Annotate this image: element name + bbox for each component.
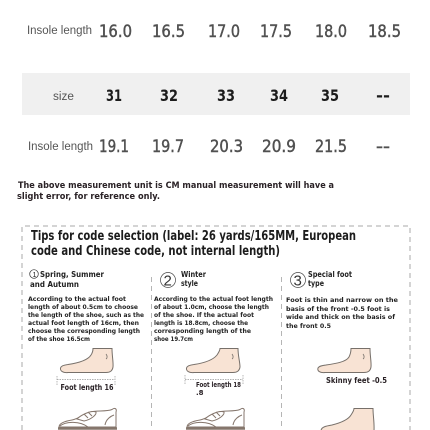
size row: 32 [160, 86, 178, 105]
foot length 18.8 measure: .8 [196, 389, 204, 397]
column dividers [152, 277, 282, 430]
tip 1: spring, summer and autumn: actual foot length of 16cm, then [28, 320, 139, 327]
icon: foot 2 [186, 348, 240, 373]
insole length row one: 17.5 [260, 22, 292, 41]
size row: 35 [321, 86, 339, 105]
tip 1: spring, summer and autumn: choose the corresponding length [28, 328, 140, 335]
measurement note: The above measurement unit is CM manual measurement will have a [18, 181, 334, 191]
icon: shoe 2 [186, 408, 245, 428]
tip 2: winter style: corresponding length of the [154, 328, 251, 335]
icon: skinny foot [318, 348, 371, 373]
tip 1: spring, summer and autumn: of the shoe 16.5cm [28, 336, 90, 343]
insole length row two: -- [376, 137, 390, 156]
tip 3: special foot type: Foot is thin and narrow on the [286, 296, 399, 304]
tip 2: winter style [154, 270, 273, 343]
tip 3: special foot type: wide and thick on the basis of [286, 313, 395, 321]
icon: foot 1 [60, 348, 113, 373]
tip 2: winter style: According to the actual foot length [154, 296, 273, 303]
tip 1: spring, summer and autumn: the length of the shoe, such as the [28, 312, 144, 319]
insole length row one [27, 22, 401, 41]
tip 2: winter style: 2 [164, 272, 172, 290]
size row [22, 73, 410, 115]
icon: foot 4 [321, 408, 374, 430]
tip 2: winter style: length is 18.8cm, choose the [154, 320, 248, 327]
size row: 33 [217, 86, 235, 105]
insole length row one: 18.5 [368, 22, 401, 41]
foot length 16 measure: Foot length 16 [60, 383, 114, 392]
tip 3: special foot type: type [308, 279, 324, 288]
tip 1: spring, summer and autumn: length of about 0.5cm to choose [28, 304, 138, 311]
insole length row one: 16.5 [152, 22, 185, 41]
insole length row one: Insole length [27, 25, 92, 37]
insole length row two: 20.3 [210, 137, 243, 156]
insole length row two [28, 137, 390, 156]
insole length row one: 18.0 [315, 22, 347, 41]
tip 2: winter style: style [181, 279, 198, 288]
tip 2: winter style: shoe 19.7cm [154, 336, 193, 343]
skinny feet label: Skinny feet -0.5 [326, 376, 387, 385]
insole length row two: 20.9 [262, 137, 296, 156]
insole length row one: 16.0 [99, 22, 132, 41]
foot length 18.8 measure: Foot length 18 [196, 381, 241, 389]
icon: shoe 1 [58, 408, 117, 428]
insole length row two: 21.5 [315, 137, 347, 156]
tip 3: special foot type: basis of the front -0.5 foot is [286, 305, 390, 313]
tip 1: spring, summer and autumn [28, 270, 144, 343]
tip 2: winter style: of the shoe. If the actual foot [154, 312, 254, 319]
measurement note: slight error, for reference only. [17, 192, 160, 202]
tip 1: spring, summer and autumn: and Autumn [30, 280, 79, 289]
measurement note [17, 181, 334, 202]
tip 1: spring, summer and autumn: According to the actual foot [28, 296, 126, 303]
insole length row two: Insole length [28, 141, 93, 153]
tip 1: spring, summer and autumn: Spring, Summer [40, 270, 104, 279]
tips heading [31, 229, 356, 259]
size row: 31 [106, 86, 122, 105]
insole length row one: 17.0 [208, 22, 240, 41]
tip 3: special foot type: the front 0.5 [286, 322, 331, 330]
tip 3: special foot type: Special foot [308, 270, 352, 279]
size row: size [53, 91, 74, 103]
dashed tips panel [22, 226, 410, 430]
tip 2: winter style: of about 1.0cm, choose the length [154, 304, 269, 311]
tips heading: code and Chinese code, not internal length) [31, 244, 280, 259]
size row: 34 [270, 86, 288, 105]
insole length row two: 19.1 [99, 137, 129, 156]
tip 1: spring, summer and autumn: 1 [32, 272, 36, 279]
tip 2: winter style: Winter [181, 270, 206, 279]
tip 3: special foot type: 3 [294, 272, 302, 290]
foot length 18.8 measure [185, 375, 243, 397]
insole length row two: 19.7 [152, 137, 184, 156]
tip 3: special foot type [286, 270, 399, 330]
foot length 16 measure [57, 376, 115, 392]
size row: -- [376, 86, 390, 105]
